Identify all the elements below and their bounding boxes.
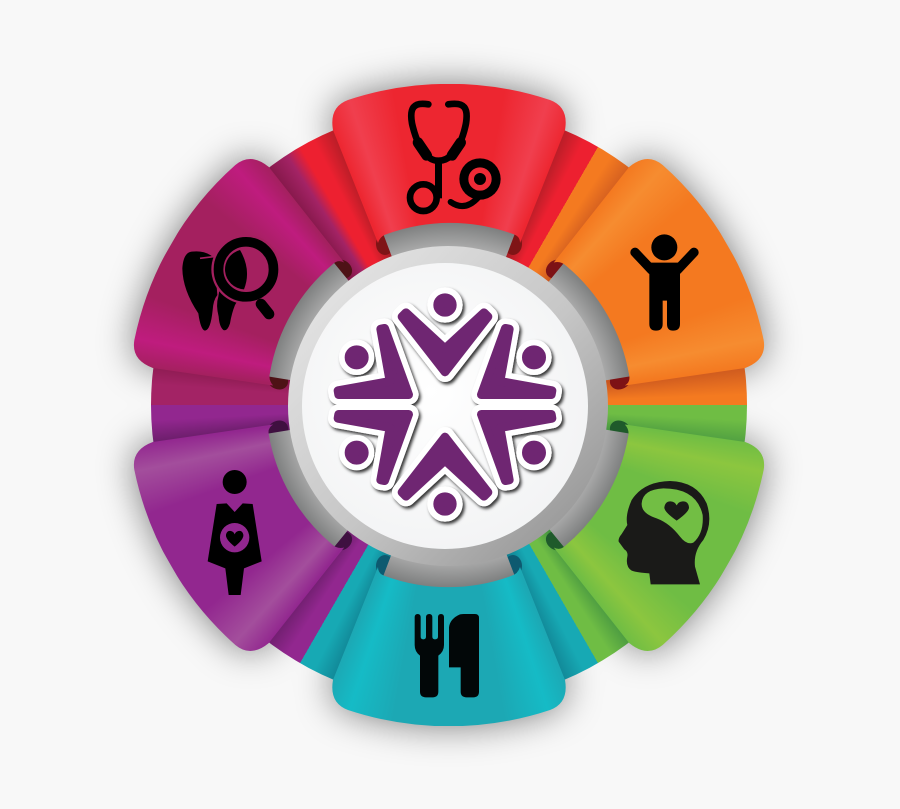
infographic wheel bbox=[111, 58, 787, 752]
white hub disc bbox=[302, 263, 588, 549]
ribbon flap: purple bbox=[134, 424, 344, 651]
icon: tooth under magnifying glass bbox=[182, 235, 281, 331]
icon: fork and knife bbox=[415, 614, 479, 697]
ribbon flap: magenta bbox=[134, 159, 344, 386]
ribbon flap: orange bbox=[554, 159, 764, 386]
icon: child with raised arms bbox=[635, 234, 694, 331]
ribbon flap: green bbox=[554, 424, 764, 651]
logo purple figures bbox=[338, 298, 552, 511]
base colour wheel with six sectors bbox=[151, 107, 747, 703]
ribbon flap: red bbox=[330, 84, 568, 256]
grey hub ring bbox=[288, 246, 608, 566]
icon: head with heart bbox=[619, 481, 709, 584]
logo: six people in a circle bbox=[338, 297, 552, 512]
icon: pregnant woman with heart bbox=[208, 470, 262, 595]
ribbon flap: teal bbox=[330, 554, 568, 726]
logo white outline with shadow bbox=[338, 297, 552, 512]
icon: stethoscope bbox=[410, 104, 501, 211]
